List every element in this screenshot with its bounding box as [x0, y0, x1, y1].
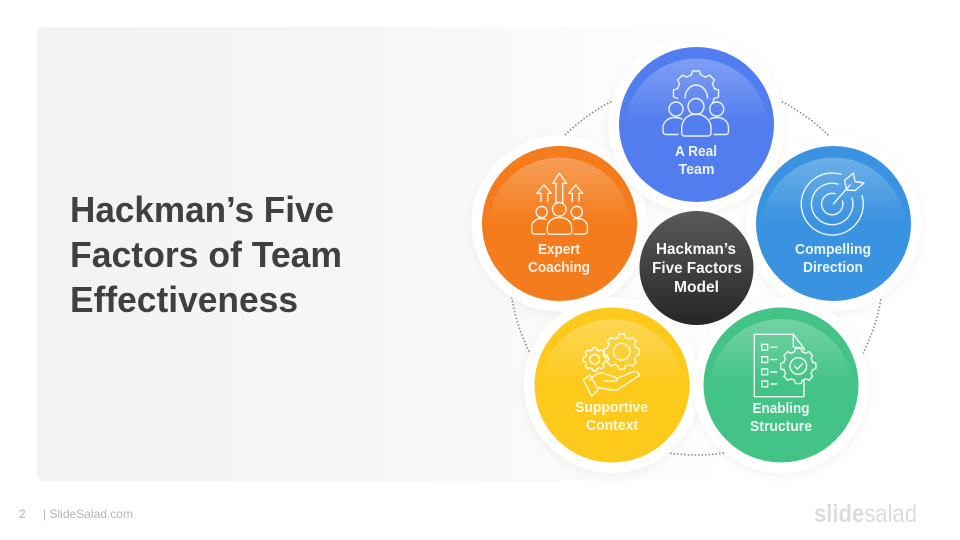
page number: 2: [19, 507, 26, 521]
factor: Expert Coaching: [472, 136, 648, 312]
center hub: [640, 211, 754, 325]
label: [528, 242, 590, 276]
label: A Real: [675, 144, 717, 160]
factor: Compelling Direction: [746, 136, 922, 312]
factor: Supportive Context: [524, 297, 700, 473]
center hub: Hackman’s: [656, 241, 736, 258]
icon: arrows and team: [532, 173, 588, 234]
title: Effectiveness: [70, 279, 298, 320]
icon: target: [801, 173, 864, 235]
label: Enabling: [752, 401, 810, 417]
factor: Enabling Structure: [693, 297, 869, 473]
label: Supportive: [575, 400, 648, 416]
dotted ring connecting factors: [510, 81, 884, 455]
center hub: Model: [674, 279, 719, 296]
label: [575, 400, 648, 434]
title: [70, 189, 342, 320]
label: Coaching: [528, 260, 590, 276]
brand logo: slidesalad: [814, 500, 917, 528]
label: Context: [586, 418, 638, 434]
background panel: [37, 27, 727, 481]
label: Team: [678, 162, 714, 178]
label: Direction: [803, 260, 863, 276]
label: [795, 242, 871, 276]
icon: checklist with gear: [754, 334, 816, 397]
label: Compelling: [795, 242, 871, 258]
factor: A Real Team: [608, 36, 784, 212]
center hub: Five Factors: [652, 260, 742, 277]
title: Factors of Team: [70, 234, 342, 275]
label: [675, 144, 717, 178]
title: Hackman’s Five: [70, 189, 334, 230]
label: Expert: [538, 242, 580, 258]
icon: team with gear: [663, 71, 728, 136]
label: Structure: [750, 419, 812, 435]
footer site name: | SlideSalad.com: [43, 507, 133, 521]
icon: gears on hand: [583, 334, 639, 396]
label: [750, 401, 812, 435]
